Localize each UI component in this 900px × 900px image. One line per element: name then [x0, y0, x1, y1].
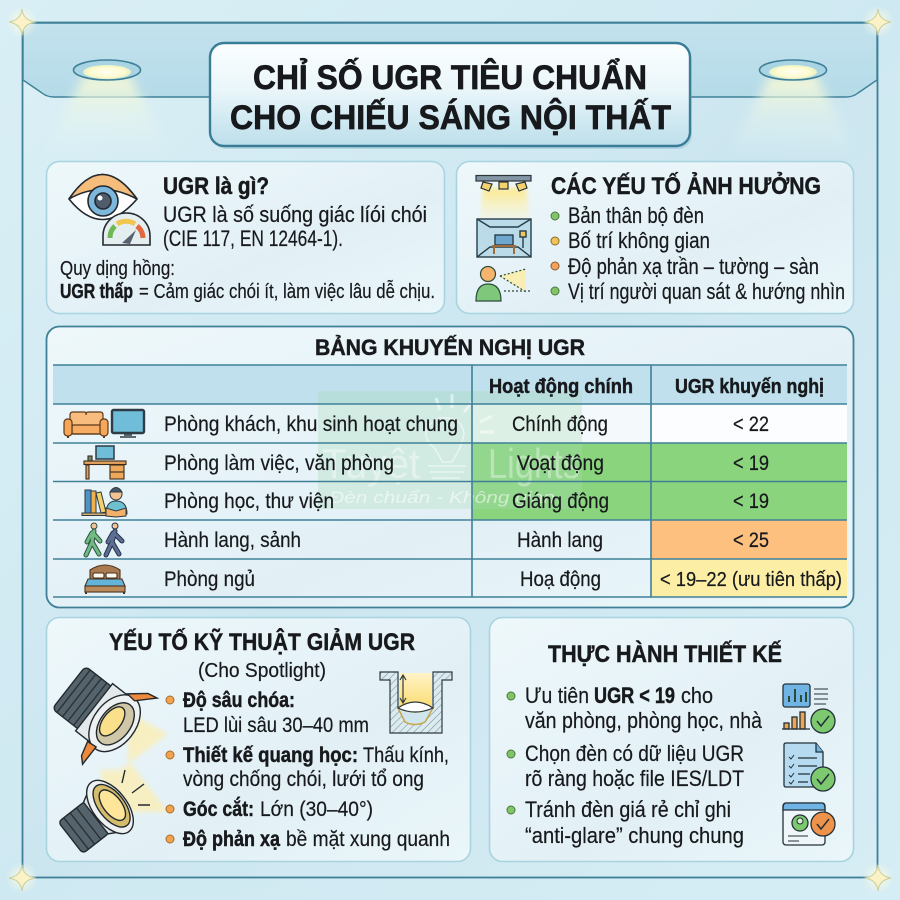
icon: eye with glare meter — [69, 174, 150, 245]
list: giảm UGR: vòng chống chói, lưới tổ ong — [183, 768, 424, 791]
heading: THỰC HÀNH THIẾT KẾ — [548, 640, 782, 668]
panel: thực hành thiết kế — [490, 618, 854, 862]
row: hành lang: Hành lang — [517, 529, 603, 552]
row: phòng khách: Phòng khách, khu sinh hoạt chung — [164, 413, 458, 436]
table column headers: Hoạt động chính — [489, 376, 633, 398]
icon: chart check — [782, 684, 835, 733]
list: giảm UGR: Thấu kính, — [363, 744, 449, 767]
icon: glare rays — [122, 770, 150, 805]
list: giảm UGR: Góc cắt: — [183, 797, 254, 821]
row: phòng làm việc: < 19 — [733, 452, 769, 475]
row: phòng ngủ — [85, 565, 842, 594]
heading: YẾU TỐ KỸ THUẬT GIẢM UGR — [109, 627, 415, 656]
table header fill — [53, 365, 847, 404]
watermark: Đèn chuẩn - Không gian — [329, 488, 555, 507]
definition text: (CIE 117, EN 12464-1). — [163, 226, 343, 251]
factor list — [551, 203, 845, 304]
icon: desk with computer — [84, 446, 126, 479]
icon: recessed depth diagram — [380, 672, 452, 733]
title box — [210, 43, 692, 149]
row: phòng khách — [64, 410, 769, 438]
row: phòng làm việc: Phòng làm việc, văn phòng — [164, 452, 394, 475]
icon: walking people — [86, 523, 122, 555]
row: phòng ngủ: Phòng ngủ — [164, 568, 255, 591]
definition text — [163, 202, 427, 251]
table column headers: UGR khuyến nghị — [675, 376, 824, 398]
list: giảm UGR: Lớn (30–40°) — [260, 798, 373, 821]
icon: sofa and tv — [64, 410, 144, 438]
ceiling band — [23, 23, 877, 97]
panel: bảng khuyến nghị UGR — [46, 326, 854, 608]
list: giảm UGR: bề mặt xung quanh — [286, 828, 450, 851]
subheading: (Cho Spotlight) — [198, 660, 326, 682]
watermark: Lights — [488, 440, 580, 487]
table heading: BẢNG KHUYẾN NGHỊ UGR — [315, 335, 585, 360]
list: thực hành: văn phòng, phòng học, nhà — [525, 708, 763, 733]
row: hành lang — [86, 523, 769, 555]
icon: books and reader — [82, 488, 127, 517]
list: thực hành: Chọn đèn có dữ liệu UGR — [525, 741, 744, 766]
icon: spotlight lower — [52, 772, 142, 862]
title line 2: CHO CHIẾU SÁNG NỘI THẤT — [230, 98, 671, 137]
factor list: Vị trí người quan sát & hướng nhìn — [568, 279, 845, 304]
icon: bed — [85, 565, 125, 594]
table column headers — [489, 376, 824, 398]
note text: = Cảm giác chói ít, làm việc lâu dễ chịu. — [139, 280, 435, 303]
icon: ceiling spotlights — [476, 176, 531, 222]
row: hành lang: < 25 — [733, 529, 769, 552]
list: thực hành: cho — [681, 683, 713, 708]
row: phòng học: Giáng động — [512, 490, 609, 513]
panel: UGR là gì — [46, 162, 444, 314]
list: thực hành: UGR < 19 — [594, 683, 675, 708]
list: giảm UGR: LED lùi sâu 30–40 mm — [183, 714, 369, 737]
icon: document check — [784, 743, 835, 791]
watermark — [318, 391, 582, 509]
row: phòng học — [82, 488, 769, 517]
panel: yếu tố kỹ thuật giảm UGR — [37, 618, 471, 862]
heading: CÁC YẾU TỐ ẢNH HƯỞNG — [551, 171, 821, 200]
icon: light beams — [100, 712, 168, 812]
list: thực hành — [507, 683, 763, 848]
ceiling light: left — [42, 60, 172, 155]
icon: spotlight upper — [37, 651, 159, 777]
icon: room — [477, 219, 531, 257]
table grid — [53, 365, 847, 597]
row: phòng khách: < 22 — [733, 413, 769, 436]
watermark: Tuyệt — [322, 440, 420, 487]
panel: các yếu tố ảnh hưởng — [456, 162, 854, 314]
list: thực hành: rõ ràng hoặc file IES/LDT — [525, 766, 744, 791]
title line 1: CHỈ SỐ UGR TIÊU CHUẨN — [253, 58, 647, 97]
list: giảm UGR — [166, 689, 450, 851]
row: phòng ngủ: Hoạ động — [520, 568, 601, 591]
list: thực hành: Tránh đèn giá rẻ chỉ ghi — [525, 797, 731, 822]
note text: UGR thấp — [60, 281, 133, 303]
row: phòng học: < 19 — [733, 490, 769, 513]
note text: Quy dịng hồng: — [60, 258, 175, 280]
list: giảm UGR: Thiết kế quang học: — [183, 744, 358, 767]
row: hành lang: Hành lang, sảnh — [164, 529, 301, 552]
factor list: Bố trí không gian — [568, 228, 710, 253]
list: thực hành: Ưu tiên — [525, 683, 589, 708]
factor list: Độ phản xạ trần – tường – sàn — [568, 254, 819, 279]
note text — [60, 258, 435, 303]
icon: profile window check — [783, 803, 835, 845]
table cell fills — [472, 404, 847, 597]
icon: observer sight lines — [476, 266, 531, 301]
row: phòng làm việc: Voạt động — [517, 452, 604, 475]
list: giảm UGR: Độ sâu chóa: — [183, 689, 295, 712]
row: phòng học: Phòng học, thư viện — [164, 490, 334, 513]
row: phòng khách: Chính động — [512, 413, 608, 436]
list: thực hành: “anti-glare” chung chung — [525, 823, 744, 848]
row: phòng ngủ: < 19–22 (ưu tiên thấp) — [660, 569, 842, 591]
list: giảm UGR: Độ phản xạ — [183, 828, 280, 851]
ceiling light: right — [728, 60, 858, 155]
row: phòng làm việc — [84, 446, 769, 479]
factor list: Bản thân bộ đèn — [568, 203, 704, 228]
definition text: UGR là số suống giác líói chói — [163, 202, 427, 227]
heading: UGR là gì? — [163, 173, 269, 200]
